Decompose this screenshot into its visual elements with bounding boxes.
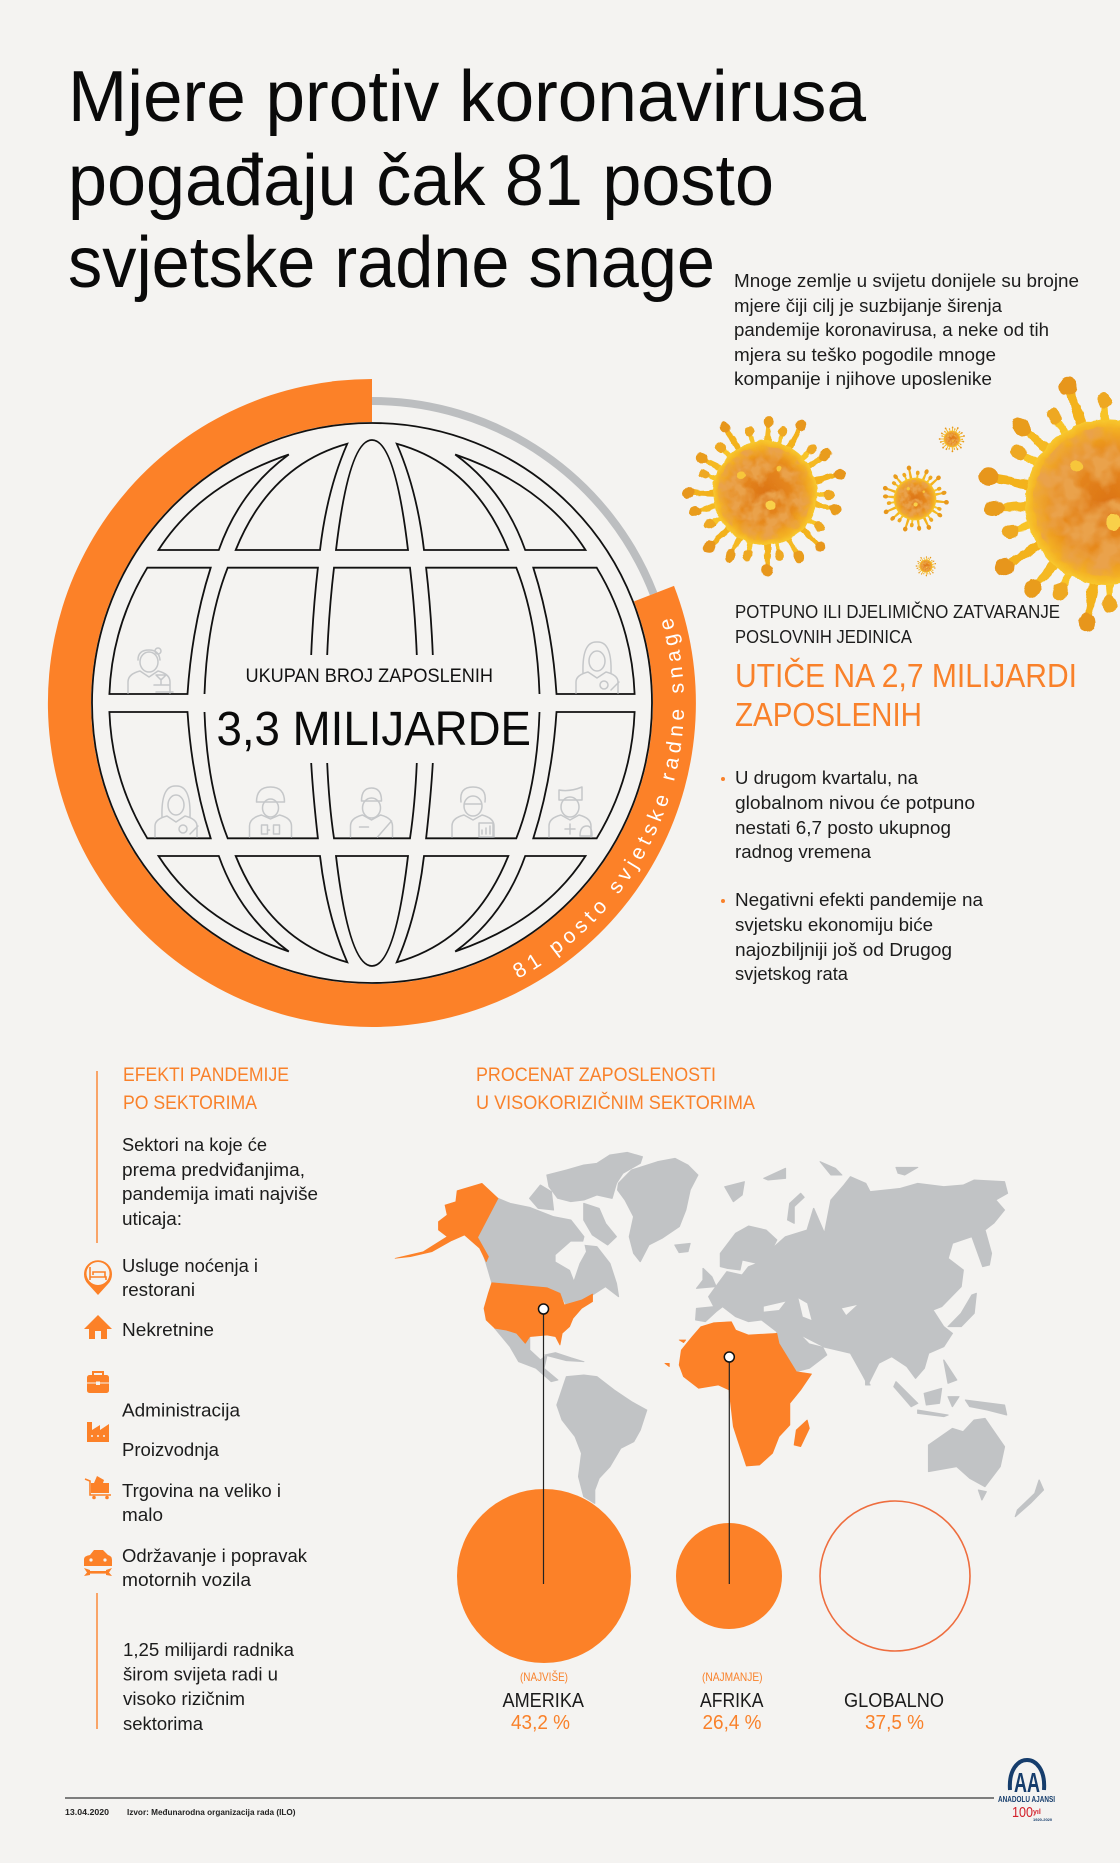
Globalno bubble — [820, 1501, 970, 1651]
Amerika label: (NAJVIŠE) — [520, 1669, 568, 1684]
sector: vehicle repair: motornih vozila — [122, 1570, 252, 1590]
sector intro: prema predviđanjima, — [122, 1160, 305, 1180]
intro text: kompanije i njihove uposlenike — [734, 369, 992, 389]
bullet two — [721, 890, 984, 984]
footer rule — [65, 1797, 994, 1799]
intro text: mjere čiji cilj je suzbijanje širenja — [734, 296, 1003, 316]
orange callout: UTIČE NA 2,7 MILIJARDI — [735, 657, 1077, 694]
Globalno label: 37,5 % — [865, 1712, 924, 1734]
icon: mechanic — [350, 788, 392, 837]
sector: real estate: Nekretnine — [122, 1320, 214, 1340]
Afrika label — [700, 1670, 764, 1734]
left column rule top — [96, 1071, 98, 1243]
ring label: 81 posto svjetske radne snage — [513, 618, 684, 978]
bullet two: svjetskog rata — [735, 964, 849, 984]
high risk workers note: visoko rizičnim — [123, 1689, 245, 1709]
icon: shopping cart — [85, 1476, 111, 1499]
globe bottom cap cells — [158, 856, 586, 966]
orange callout: ZAPOSLENIH — [735, 696, 922, 733]
high risk workers note: širom svijeta radi u — [123, 1664, 278, 1684]
sector intro: pandemija imati najviše — [122, 1184, 318, 1204]
sector intro — [122, 1135, 318, 1229]
icon: woman with stethoscope, upper right — [576, 642, 619, 693]
sector: vehicle repair — [122, 1546, 308, 1590]
Afrika leader — [724, 1352, 734, 1584]
sector heading — [123, 1065, 289, 1114]
map: Africa — [665, 1322, 811, 1466]
sector heading: EFEKTI PANDEMIJE — [123, 1065, 289, 1086]
icon: lodging pin — [84, 1260, 112, 1295]
sector: lodging: restorani — [122, 1280, 195, 1300]
title: svjetske radne snage — [68, 223, 715, 303]
title: Mjere protiv koronavirusa — [68, 57, 867, 137]
intro text: Mnoge zemlje u svijetu donijele su brojne — [734, 271, 1079, 291]
map heading — [476, 1065, 755, 1114]
Afrika bubble — [676, 1523, 782, 1629]
bullet one: U drugom kvartalu, na — [735, 768, 919, 788]
Amerika label — [502, 1669, 584, 1734]
sector intro: Sektori na koje će — [122, 1135, 267, 1155]
logo: Anadolu Ajansi: ANADOLU AJANSI — [998, 1795, 1055, 1804]
bullet one: nestati 6,7 posto ukupnog — [735, 818, 951, 838]
bullet two: Negativni efekti pandemije na — [735, 890, 984, 910]
Amerika label: 43,2 % — [511, 1712, 570, 1734]
sector: lodging: Usluge noćenja i — [122, 1256, 258, 1276]
sector: trade: Trgovina na veliko i — [122, 1481, 281, 1501]
bullet two: svjetsku ekonomiju biće — [735, 915, 933, 935]
closure heading: POTPUNO ILI DJELIMIČNO ZATVARANJE — [735, 601, 1060, 622]
Amerika leader — [538, 1304, 548, 1584]
icon: coronavirus particles — [682, 352, 1120, 658]
footer source: 13.04.2020 — [65, 1808, 110, 1817]
grey remainder arc — [372, 401, 654, 594]
sector intro: uticaja: — [122, 1209, 182, 1229]
logo: Anadolu Ajansi: 100 — [1012, 1804, 1033, 1821]
intro text — [734, 271, 1079, 389]
logo: Anadolu Ajansi — [998, 1760, 1055, 1822]
orange callout — [735, 657, 1077, 733]
sector: manufacturing: Proizvodnja — [122, 1440, 220, 1460]
sector: trade — [122, 1481, 281, 1525]
high risk workers note: sektorima — [123, 1714, 204, 1734]
Amerika label: AMERIKA — [502, 1689, 584, 1712]
Afrika label: AFRIKA — [700, 1689, 764, 1712]
icon: house — [84, 1315, 112, 1339]
map: grey land — [478, 1152, 1043, 1517]
logo: Anadolu Ajansi: yıl — [1033, 1809, 1041, 1816]
sector: lodging — [122, 1256, 258, 1300]
Afrika label: (NAJMANJE) — [702, 1670, 762, 1684]
icon: car and wrench — [84, 1550, 112, 1576]
title: pogađaju čak 81 posto — [68, 141, 774, 221]
world map — [395, 1152, 1043, 1517]
sector: administration: Administracija — [122, 1400, 241, 1420]
globe lower band cells — [109, 712, 635, 838]
closure heading — [735, 601, 1060, 647]
title — [68, 57, 867, 303]
icon: factory — [87, 1422, 109, 1442]
bullet one: radnog vremena — [735, 842, 872, 862]
footer source: Izvor: Međunarodna organizacija rada (ILO) — [127, 1808, 296, 1817]
intro text: pandemije koronavirusa, a neke od tih — [734, 320, 1049, 340]
icon: analyst — [452, 787, 494, 837]
Afrika label: 26,4 % — [702, 1712, 762, 1734]
intro text: mjera su teško pogodile mnoge — [734, 345, 996, 365]
icon: woman with stethoscope, lower left — [155, 786, 198, 837]
globe — [92, 423, 652, 983]
left column rule bottom — [96, 1593, 98, 1729]
Globalno label — [844, 1689, 944, 1734]
map: United States — [395, 1183, 592, 1345]
bullet one: globalnom nivou će potpuno — [735, 793, 975, 813]
icon: soldier — [250, 787, 292, 837]
bullet one — [721, 768, 975, 862]
logo: Anadolu Ajansi: AA — [1014, 1767, 1040, 1798]
closure heading: POSLOVNIH JEDINICA — [735, 626, 913, 647]
Globalno label: GLOBALNO — [844, 1689, 944, 1712]
icon: briefcase — [87, 1372, 109, 1393]
orange 81 percent ring — [48, 379, 696, 1027]
Amerika bubble — [457, 1489, 631, 1663]
map heading: PROCENAT ZAPOSLENOSTI — [476, 1065, 716, 1086]
sector: vehicle repair: Održavanje i popravak — [122, 1546, 308, 1566]
logo: Anadolu Ajansi: 1920-2020 — [1033, 1817, 1053, 1822]
high risk workers note — [123, 1640, 295, 1734]
icon: waiter — [128, 648, 173, 693]
globe centre number: 3,3 MILIJARDE — [216, 703, 531, 756]
sector heading: PO SEKTORIMA — [123, 1093, 257, 1114]
bullet two: najozbiljniji još od Drugog — [735, 940, 952, 960]
high risk workers note: 1,25 milijardi radnika — [123, 1640, 295, 1660]
globe upper band cells — [109, 568, 635, 694]
globe centre label: UKUPAN BROJ ZAPOSLENIH — [246, 666, 493, 687]
globe top cap cells — [158, 440, 586, 550]
sector: trade: malo — [122, 1505, 163, 1525]
icon: chef — [549, 787, 592, 837]
map heading: U VISOKORIZIČNIM SEKTORIMA — [476, 1092, 755, 1114]
